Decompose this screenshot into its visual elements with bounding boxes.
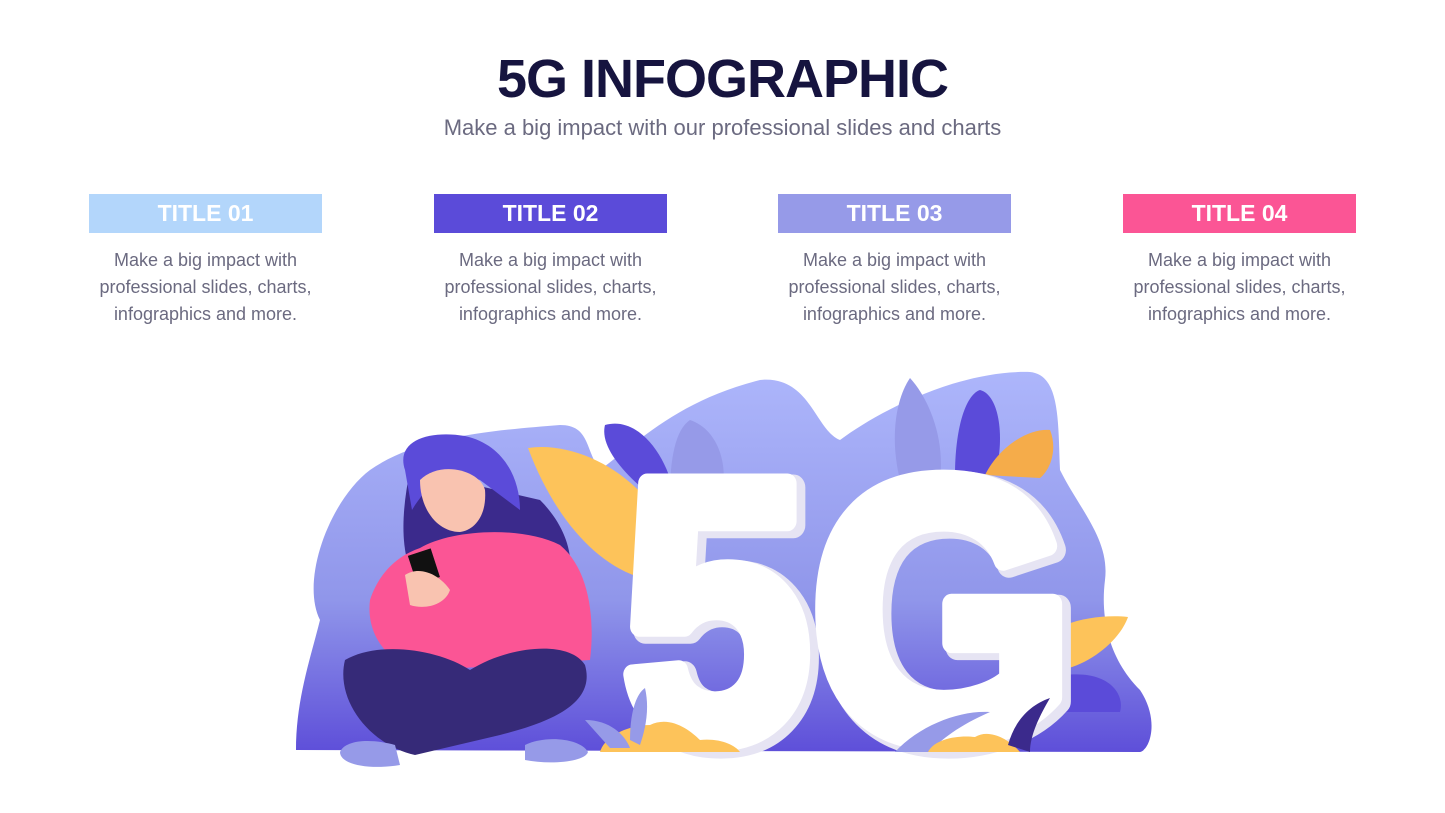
card 1: TITLE 01 — [158, 200, 253, 226]
title: 5G INFOGRAPHIC — [497, 49, 948, 109]
leaves — [528, 378, 1128, 712]
woman — [340, 434, 592, 767]
subtitle: Make a big impact with our professional slides and charts — [444, 115, 1001, 140]
card 2: TITLE 02 — [503, 200, 598, 226]
card 3: TITLE 03 — [847, 200, 942, 226]
card 3 — [778, 194, 1011, 324]
card 3: Make a big impact with professional slides, charts, infographics and more. — [788, 250, 1001, 324]
card 4 — [1123, 194, 1356, 324]
card 2: Make a big impact with professional slides, charts, infographics and more. — [444, 250, 657, 324]
card 1 — [89, 194, 322, 324]
card 4: TITLE 04 — [1192, 200, 1287, 226]
card 1: Make a big impact with professional slides, charts, infographics and more. — [99, 250, 312, 324]
background blob — [296, 372, 1152, 752]
card 4: Make a big impact with professional slides, charts, infographics and more. — [1133, 250, 1346, 324]
bushes — [585, 688, 1050, 752]
5G text: 5G — [622, 404, 1074, 813]
5G text: 5G — [628, 408, 1080, 813]
card 2 — [434, 194, 667, 324]
